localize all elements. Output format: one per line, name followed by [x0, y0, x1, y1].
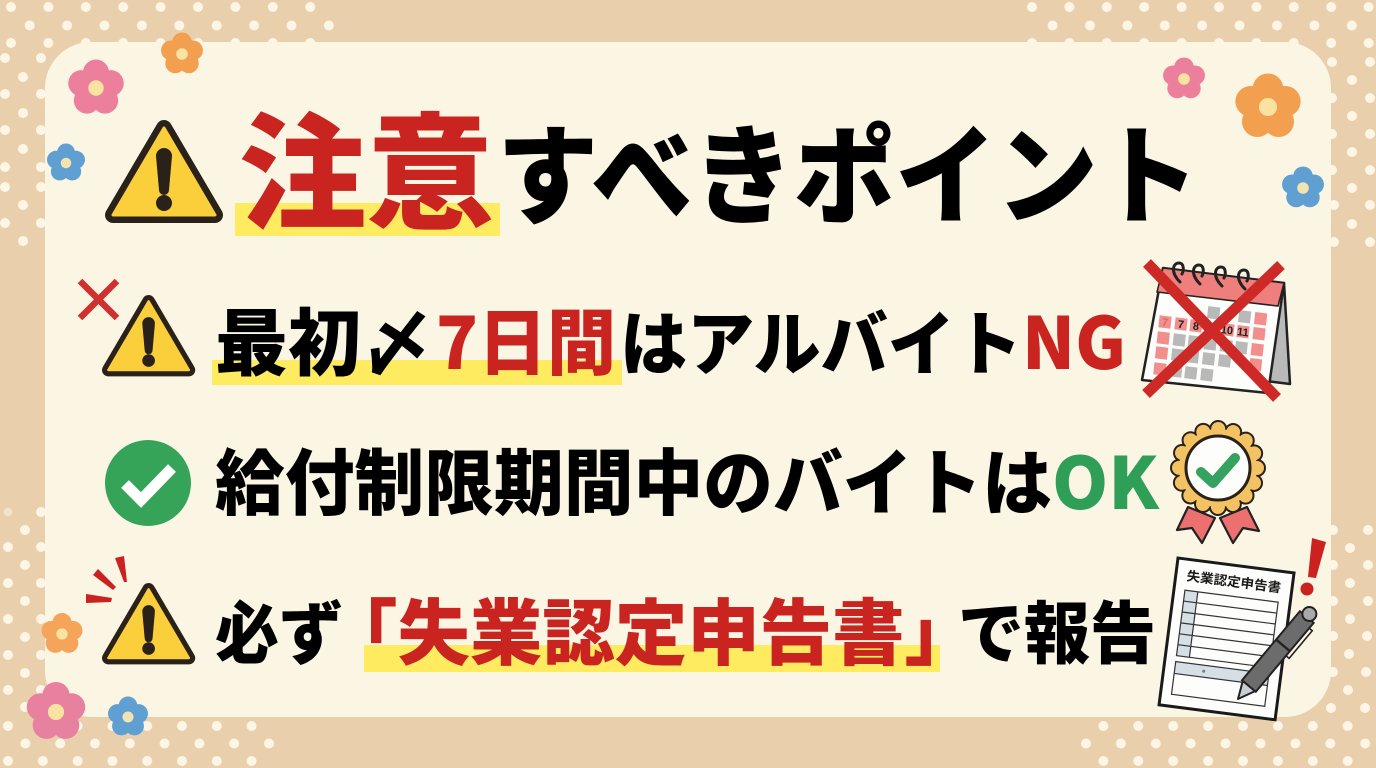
flower: orange right: [1235, 74, 1301, 137]
flower: orange bottom left: [42, 613, 82, 653]
row 3 text: 「失業認定申告書」: [325, 575, 977, 680]
icon: calendar crossed out: 7: [1161, 317, 1169, 329]
icon: red exclamation mark: [1300, 538, 1326, 596]
row 2 text: 給付制限期間中のバイトは: [215, 425, 1052, 530]
flower: pink top right: [1163, 58, 1205, 98]
row 1 text: NG: [1022, 285, 1126, 390]
title: [239, 74, 1199, 256]
icon: calendar crossed out: 8: [1192, 321, 1200, 333]
icon: calendar crossed out: 11: [1236, 326, 1249, 339]
icon: warning triangle row 1: [108, 301, 189, 370]
flower: pink bottom left: [27, 682, 85, 739]
flower: blue left: [47, 144, 85, 180]
row 3 text: 必ず: [215, 579, 343, 678]
title highlight: yellow marker: [235, 203, 500, 236]
icon: report form with pen: 失業認定申告書: [1186, 565, 1282, 596]
row 1 text: 〆: [361, 285, 433, 390]
icon: gold medal with check: [1177, 429, 1259, 543]
flower: blue bottom left: [108, 696, 148, 735]
title: 注意: [239, 74, 494, 256]
icon: warning triangle row 3: [108, 589, 189, 658]
row 3 text: で報告: [958, 579, 1156, 678]
row 1 text: 7日間: [436, 285, 616, 390]
icon: red alert rays: [86, 556, 127, 603]
icon: green check circle: [105, 440, 191, 526]
flower: blue right: [1282, 166, 1324, 207]
row 2 text: OK: [1052, 425, 1160, 530]
row 1 text: はアルバイト: [620, 289, 1022, 390]
icon: report form with pen: [1159, 558, 1324, 720]
icon: calendar crossed out: [1142, 263, 1290, 398]
icon: title warning triangle: [113, 128, 215, 215]
row 3 text: [215, 575, 1156, 680]
row 3 highlight: yellow marker: [364, 645, 940, 672]
flower: pink top left: [68, 60, 124, 114]
icon: calendar crossed out: 10: [1220, 324, 1234, 337]
row 1 text: [215, 285, 1126, 391]
title: すべきポイント: [497, 91, 1199, 247]
row 1 text: 最初: [215, 285, 361, 391]
icon: red cross mark: [80, 281, 117, 318]
icon: calendar crossed out: 7: [1177, 319, 1185, 331]
flower: orange top: [161, 32, 203, 73]
row 1 highlight: yellow marker: [212, 360, 622, 385]
